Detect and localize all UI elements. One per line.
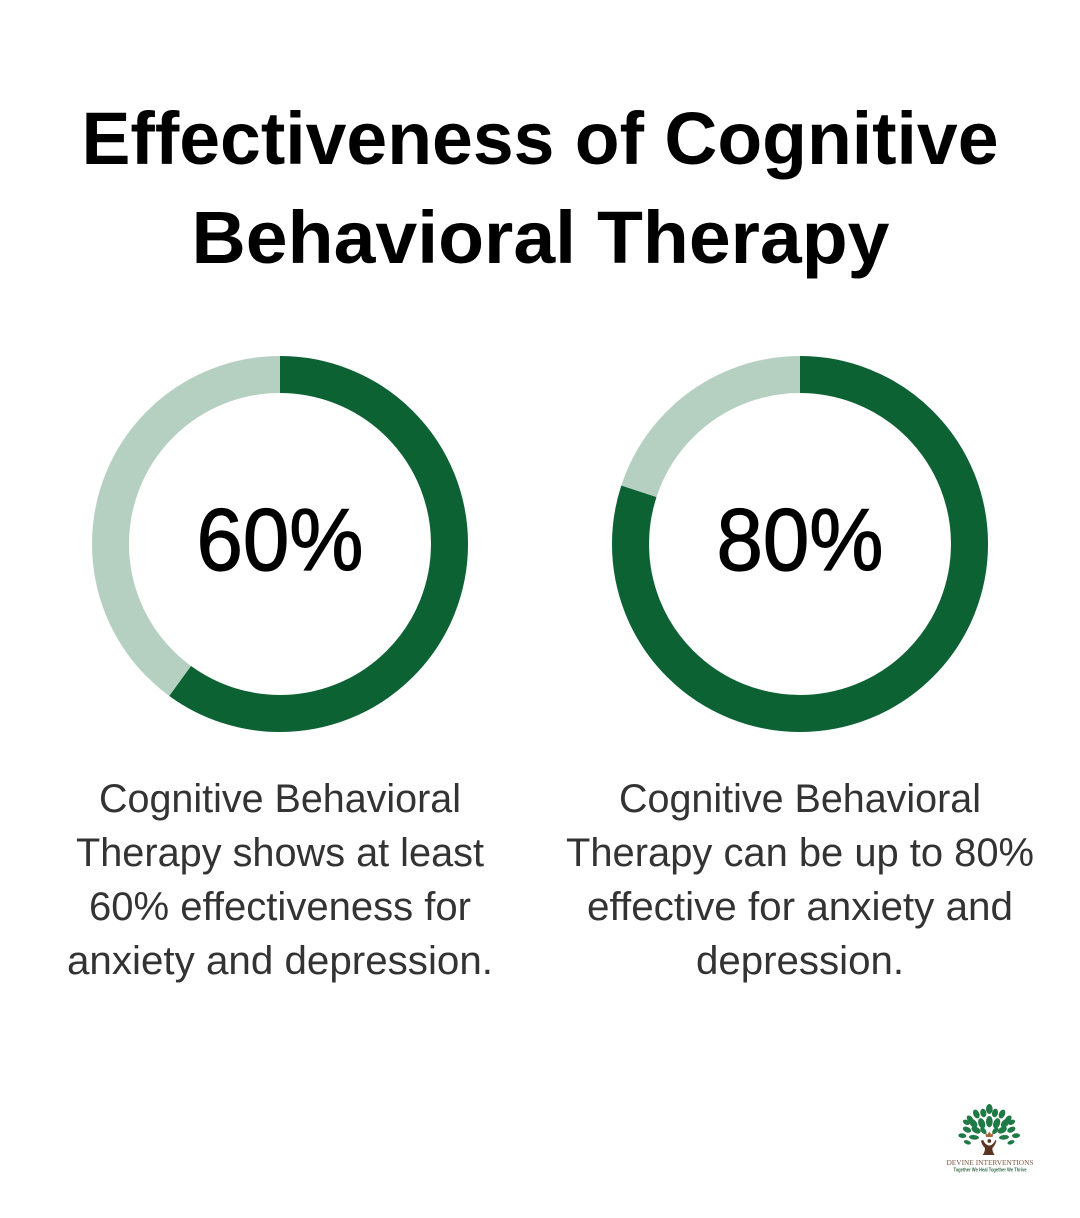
text block: 60% description: Therapy shows at least (76, 831, 484, 875)
80% value: 80% (716, 490, 884, 589)
title: Effectiveness of Cognitive (82, 97, 998, 180)
text block: 80% description: effective for anxiety and (587, 885, 1013, 929)
title: Behavioral Therapy (192, 196, 890, 279)
text block: 80% description (566, 777, 1034, 983)
60% value: 60% (196, 490, 364, 589)
text block: 80% description: Cognitive Behavioral (619, 777, 981, 821)
text block: 80% description: Therapy can be up to 80% (566, 831, 1034, 875)
text block: 60% description: 60% effectiveness for (89, 885, 471, 929)
icon: Devine Interventions tree logo (946, 1104, 1034, 1174)
logo tagline: Together We Heal Together We Thrive (954, 1168, 1027, 1174)
logo name: DEVINE INTERVENTIONS (946, 1158, 1034, 1167)
panel: 60% donut chart (110, 374, 450, 714)
text block: 60% description: anxiety and depression. (67, 939, 493, 983)
title (82, 97, 998, 279)
text block: 60% description: Cognitive Behavioral (99, 777, 461, 821)
panel: 80% donut chart (630, 374, 970, 714)
text block: 80% description: depression. (696, 939, 904, 983)
text block: 60% description (67, 777, 493, 983)
